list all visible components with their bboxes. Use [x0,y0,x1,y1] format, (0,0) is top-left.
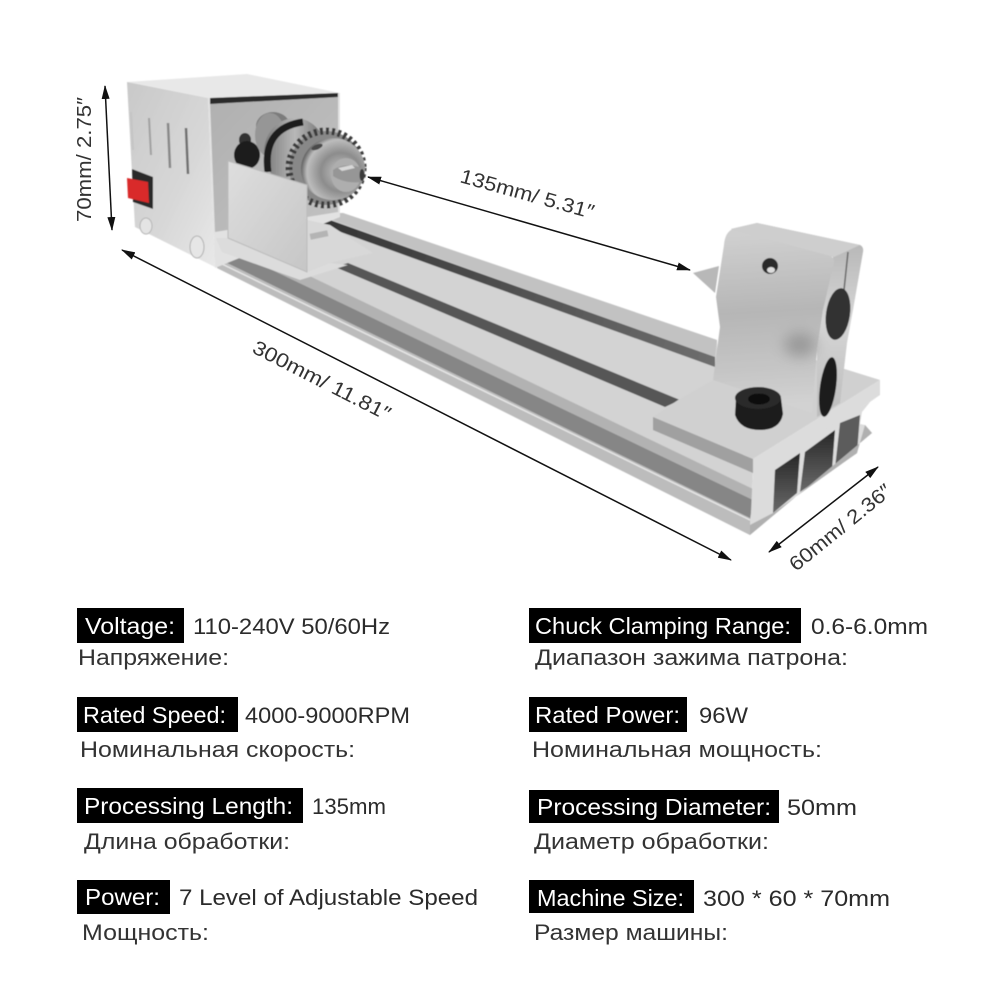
dimension: width: 60mm/ 2.36″ [785,480,896,576]
spec: chuck clamping range [529,608,928,670]
dimension: total length [122,250,731,560]
spec: rated power [529,697,822,762]
dimension: height: 70mm/ 2.75″ [74,97,96,222]
side profile bands [222,234,753,500]
spec: voltage: Напряжение: [78,645,229,670]
spec: processing length: Processing Length: [84,793,293,819]
locking knob [735,387,783,430]
spec: processing diameter: Диаметр обработки: [534,829,769,854]
spec: power: 7 Level of Adjustable Speed [179,885,478,910]
spec: machine size: Machine Size: [537,885,684,911]
spec: voltage: Voltage: [85,613,175,639]
dimension: width [769,467,896,576]
spec: processing diameter [529,790,857,854]
spec: voltage: 110-240V 50/60Hz [193,614,390,639]
spec: machine size: Размер машины: [534,920,728,945]
spec: processing length: 135mm [312,794,386,819]
spec: rated power: Rated Power: [535,702,680,728]
drill chuck [234,112,365,205]
spec: power: Мощность: [82,920,209,945]
dimension: working length: 135mm/ 5.31″ [458,166,597,224]
motor housing [127,74,340,268]
spec: processing length: Длина обработки: [84,829,290,854]
hole [762,258,778,274]
spec: rated speed: Номинальная скорость: [80,737,355,762]
tailstock base [653,352,880,475]
spec: processing diameter: Processing Diameter: [537,794,771,820]
dimension: height [74,86,112,230]
spec: power: Power: [85,884,160,910]
lathe rail [217,213,753,535]
power switch [127,169,153,209]
spec: rated speed [77,697,410,762]
chuck guard plate [216,161,373,280]
spec: rated power: Номинальная мощность: [532,737,822,762]
spec: chuck clamping range: 0.6-6.0mm [811,614,928,639]
tailstock upright [693,223,863,418]
spec: chuck clamping range: Диапазон зажима патрона: [535,645,848,670]
centre slot [335,263,680,407]
rail end profile [750,395,880,535]
dimension: working length [368,166,690,270]
far rail strip [313,213,717,357]
spec: machine size [529,880,890,945]
spec: rated speed: Rated Speed: [83,702,226,728]
housing screws [140,218,204,258]
spec: processing length [77,788,386,854]
spec: power [77,880,478,945]
spec: processing diameter: 50mm [787,795,857,820]
spec: rated speed: 4000-9000RPM [245,703,410,728]
spec: chuck clamping range: Chuck Clamping Range: [535,613,791,639]
dimension: total length: 300mm/ 11.81″ [249,337,394,425]
spec: rated power: 96W [699,703,748,728]
spec: voltage [77,608,390,670]
product photo: mini lathe [127,74,880,535]
spec: machine size: 300 * 60 * 70mm [703,886,890,911]
